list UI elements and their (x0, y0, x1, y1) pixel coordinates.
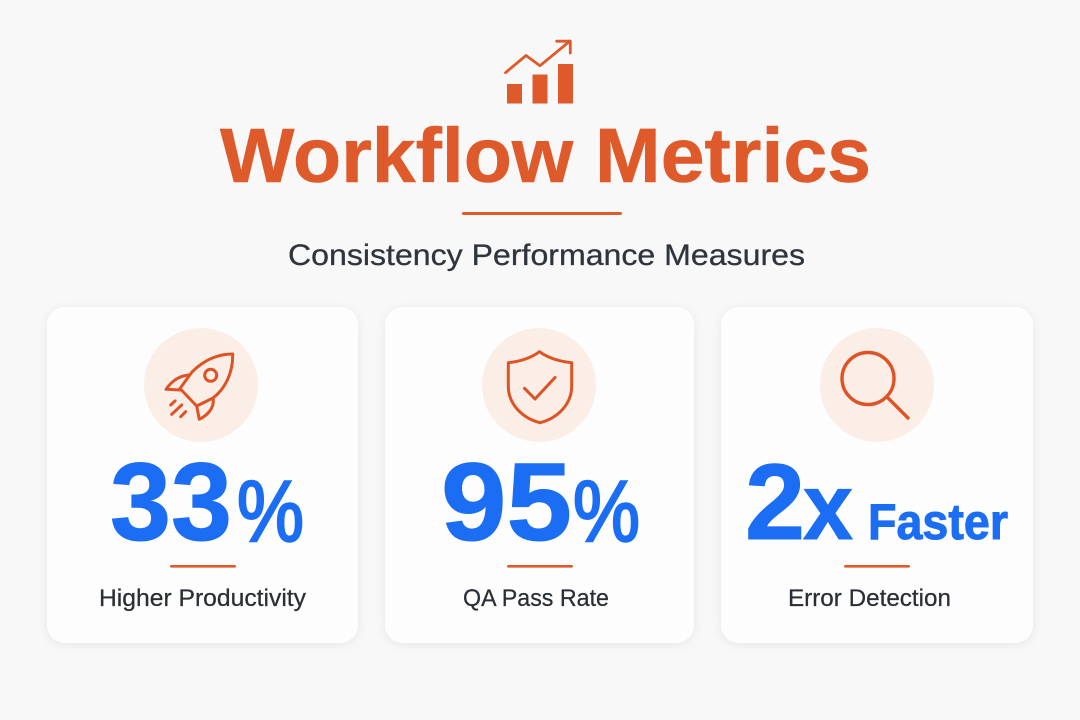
icon: rocket (144, 328, 258, 442)
stat: 2x faster: 2 (745, 441, 805, 562)
panel: qa pass rate (385, 307, 694, 643)
stat: 33%: % (237, 464, 304, 560)
title: Workflow Metrics (220, 113, 871, 199)
icon: magnifier (820, 328, 934, 442)
subtitle: Consistency Performance Measures (288, 239, 805, 272)
label: QA Pass Rate (463, 585, 609, 612)
stat: 95%: 95 (441, 441, 572, 564)
divider (507, 565, 573, 568)
stat: 33%: 33 (110, 441, 232, 564)
stat: 2x faster (745, 441, 1008, 562)
stat: 33% (110, 441, 304, 564)
panel: higher productivity (47, 307, 358, 643)
divider (844, 565, 910, 568)
label: Higher Productivity (99, 585, 306, 612)
stat: 95%: % (573, 464, 640, 560)
panel: error detection (721, 307, 1033, 643)
icon: shield (482, 328, 596, 442)
divider (170, 565, 236, 568)
stat: 2x faster: Faster (868, 494, 1008, 550)
stat: 2x faster: x (803, 454, 853, 559)
title divider (462, 212, 622, 215)
icon: growth chart (506, 41, 573, 104)
stat: 95% (441, 441, 640, 564)
label: Error Detection (788, 585, 951, 612)
